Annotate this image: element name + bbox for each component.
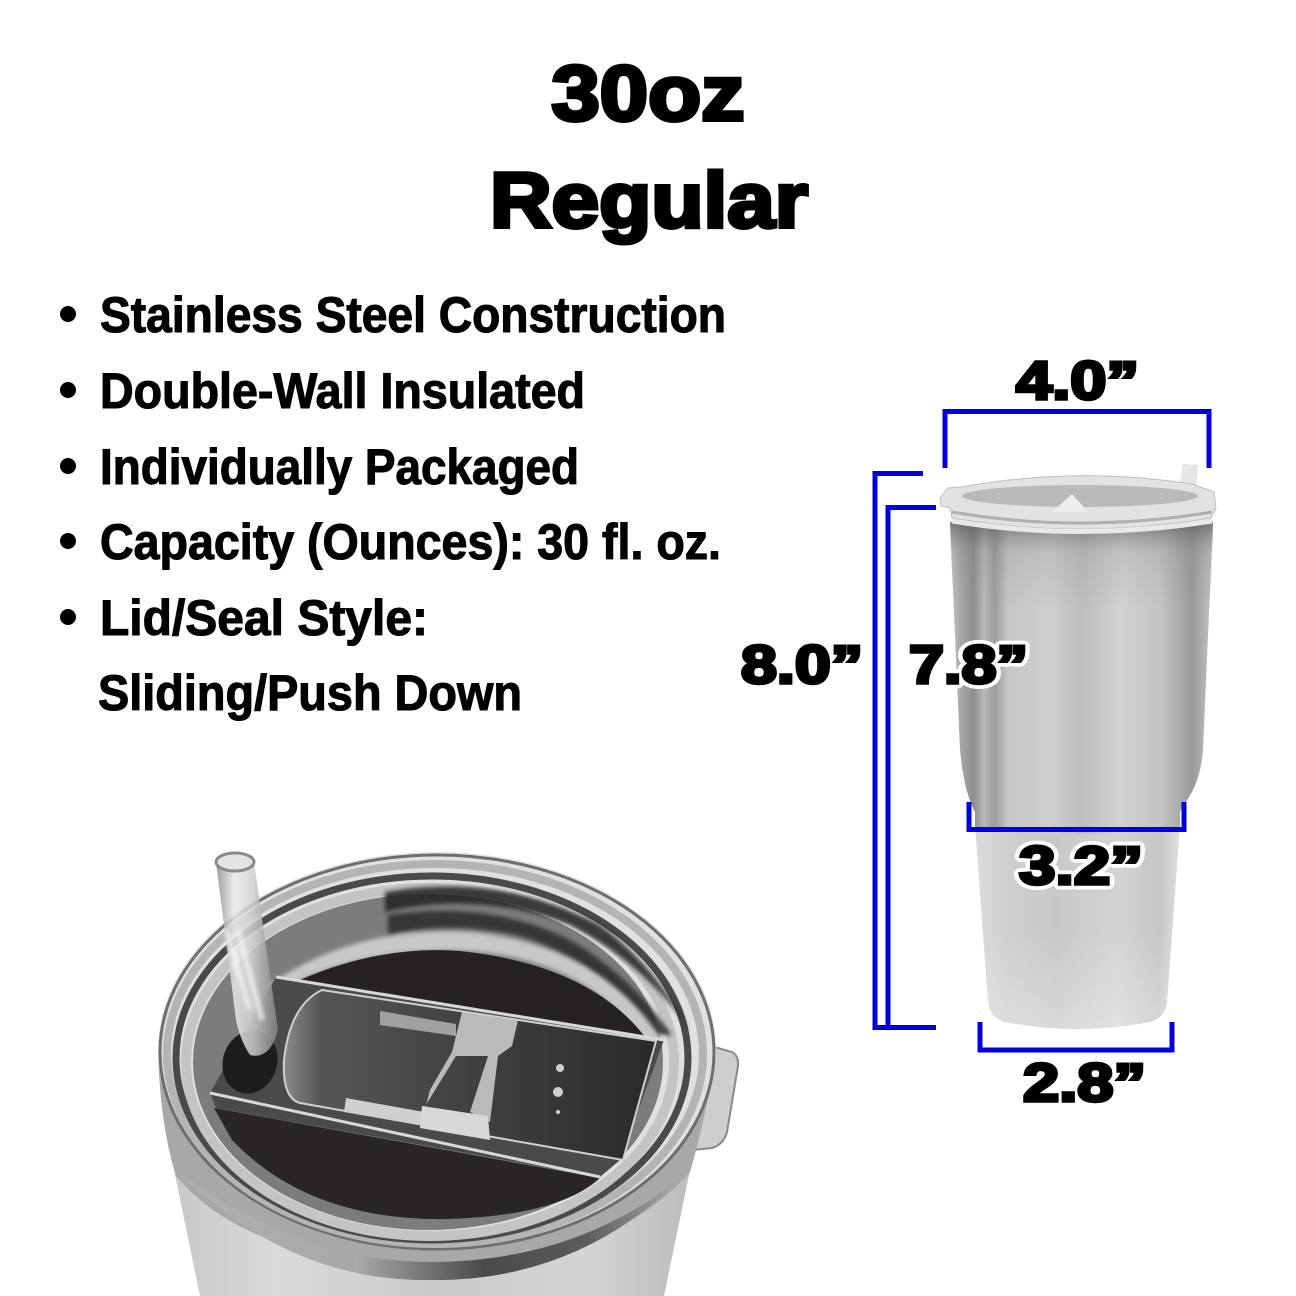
light steel crescent [262, 931, 662, 1040]
dark interior [300, 950, 645, 1037]
slider ribs [380, 1011, 456, 1036]
rim shadow on body [178, 1172, 688, 1280]
outer lid [158, 852, 716, 1248]
title: Regular [490, 156, 808, 244]
bracket: 3.2 mid diameter [969, 802, 1184, 830]
top lid dark reflection band [385, 887, 690, 1030]
title [490, 49, 808, 244]
label: 7.8: 7.8” [909, 635, 1028, 695]
label: 3.2: 3.2” [1019, 836, 1143, 896]
lower body highlight [981, 930, 1173, 1029]
feature list: Sliding/Push Down [98, 665, 522, 721]
sliding panel frame [210, 977, 664, 1177]
feature list: Lid/Seal Style: [100, 590, 428, 646]
upper body shading [950, 522, 1213, 610]
feature list: Individually Packaged [100, 439, 579, 495]
label: 2.8: 2.8” [1023, 1053, 1146, 1113]
hole under straw [214, 1023, 286, 1101]
feature list: Capacity (Ounces): 30 fl. oz. [100, 514, 721, 570]
lid tab [688, 1044, 738, 1150]
bracket: 8.0 total height [875, 474, 936, 1028]
lid rings [160, 855, 714, 1249]
inner lid recess [193, 894, 663, 1230]
bracket: 7.8 body height [888, 508, 936, 1028]
straw [216, 853, 278, 1056]
tumbler photo with dimensions [741, 351, 1216, 1113]
feature list: Double-Wall Insulated [100, 363, 585, 419]
slider dome [284, 990, 656, 1160]
hinge foot [420, 1106, 490, 1140]
slider dots [553, 1064, 564, 1114]
label: 4.0: 4.0” [1016, 351, 1139, 411]
bracket: 2.8 base diameter [980, 1022, 1172, 1050]
tumbler lower body [975, 826, 1180, 1029]
label: 3.2: 3.2” [1019, 836, 1143, 896]
feature list [60, 287, 726, 721]
slider hinge [420, 1012, 518, 1128]
feature list: Stainless Steel Construction [100, 287, 726, 343]
steel body [174, 1170, 690, 1296]
lid skirt [158, 1050, 716, 1264]
bracket: 4.0 top diameter [945, 412, 1209, 468]
label: 8.0: 8.0” [741, 635, 863, 695]
label: 7.8: 7.8” [909, 635, 1028, 695]
lid close-up photo [158, 852, 738, 1296]
title: 30oz [552, 49, 744, 137]
tumbler lid [940, 464, 1216, 532]
tumbler upper body [950, 522, 1213, 834]
